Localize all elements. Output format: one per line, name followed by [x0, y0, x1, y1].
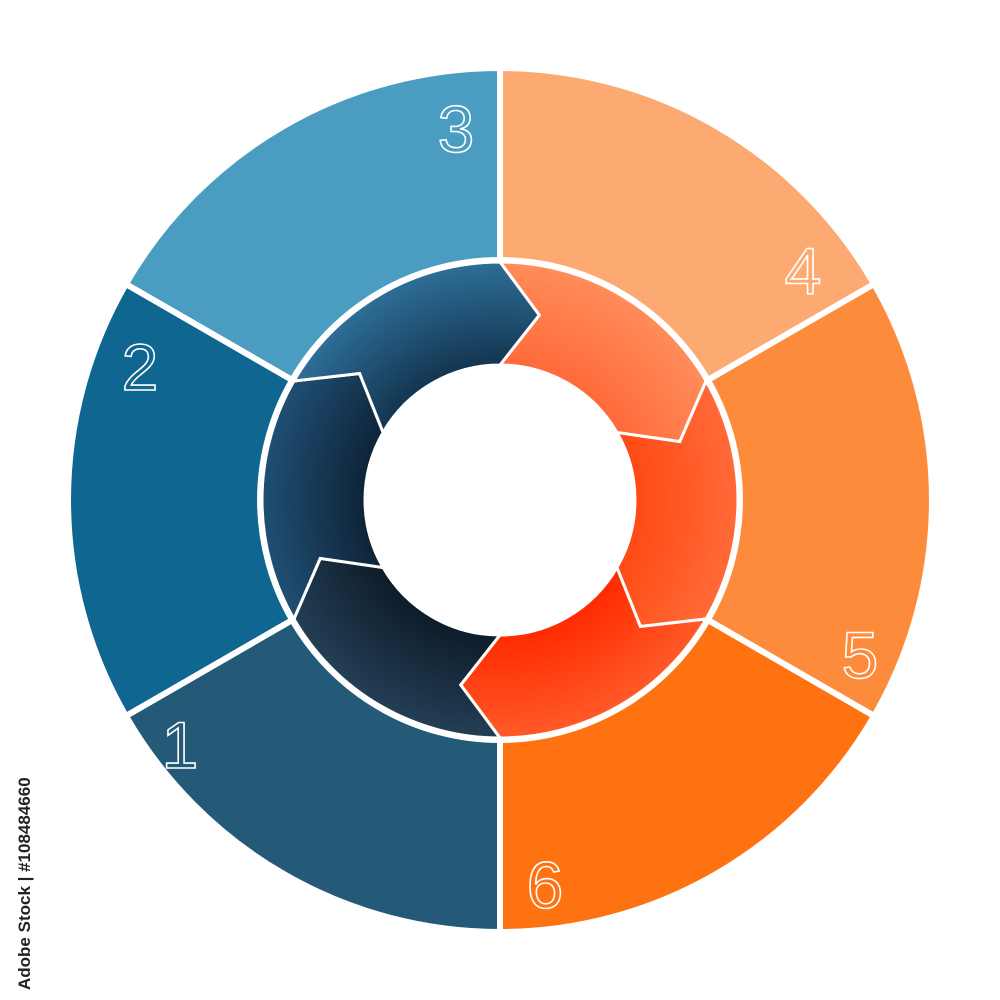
segment 3 [126, 68, 500, 380]
segment 2 [68, 284, 292, 716]
arrow: right [617, 381, 738, 626]
number 1: 1 [162, 708, 198, 782]
arrow: top-left [294, 262, 539, 432]
inner arrow ring [262, 262, 738, 738]
segment 4 [500, 68, 874, 380]
number 3: 3 [438, 92, 474, 166]
segment 5 [708, 284, 932, 716]
arrow: bottom-right [461, 568, 706, 738]
number 6: 6 [527, 848, 563, 922]
number 2: 2 [122, 330, 158, 404]
arrow: left [262, 374, 383, 619]
numbers [122, 92, 878, 922]
segment 6 [500, 620, 874, 932]
outer ring segments [68, 68, 932, 932]
arrow: bottom-left [294, 558, 500, 738]
number 5: 5 [842, 618, 878, 692]
side credit text: Adobe Stock | #108484660 [15, 777, 34, 990]
segment 1 [126, 620, 500, 932]
number 4: 4 [785, 234, 821, 308]
arrow: top-right [500, 262, 706, 442]
